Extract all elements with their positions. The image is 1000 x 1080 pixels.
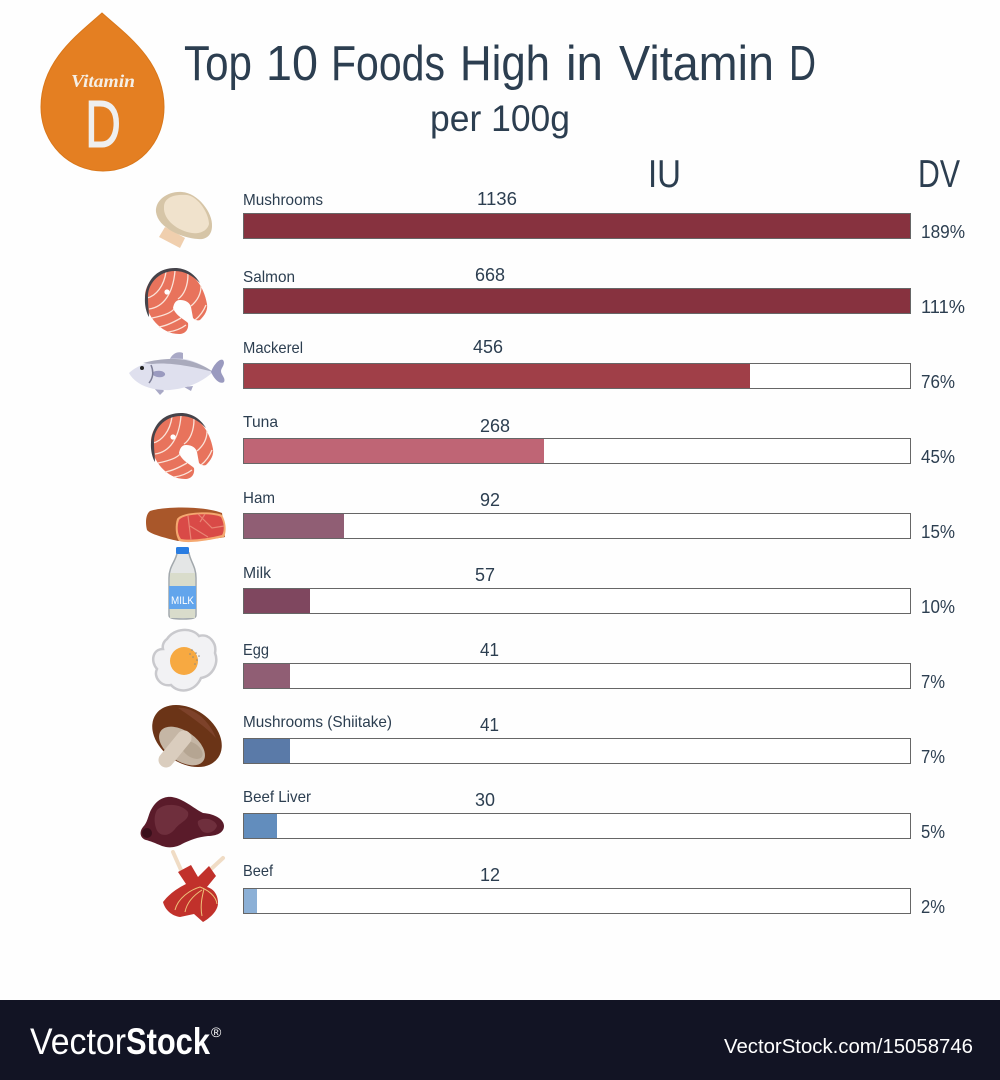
label: Milk — [243, 565, 272, 582]
footer logo — [30, 1021, 222, 1062]
label: Egg — [243, 642, 269, 659]
footer logo: Stock — [126, 1021, 210, 1062]
icon: vitamin D drop — [41, 13, 164, 171]
percent: 2% — [921, 897, 945, 917]
title: Foods — [331, 37, 445, 91]
bar — [244, 664, 910, 688]
value: 57 — [475, 565, 495, 585]
label: Salmon — [243, 269, 295, 286]
percent: 10% — [921, 597, 955, 617]
icon: beef ribs — [163, 852, 223, 922]
bar — [244, 814, 910, 838]
icon: shiitake mushroom — [140, 692, 234, 780]
value: 41 — [480, 715, 499, 735]
icon: salmon steak — [145, 268, 207, 334]
row: Mushrooms — [156, 189, 965, 248]
value: 41 — [480, 640, 499, 660]
row: Mackerel — [129, 337, 955, 395]
label: Mushrooms — [243, 192, 323, 209]
bar — [244, 888, 910, 914]
percent: 7% — [921, 672, 945, 692]
label: Tuna — [243, 414, 278, 431]
title: High — [460, 37, 550, 91]
bar — [244, 288, 910, 314]
percent: 45% — [921, 447, 955, 467]
row: Ham — [146, 490, 955, 542]
row: Beef Liver — [141, 789, 945, 847]
row: Egg — [153, 630, 945, 692]
bar — [244, 588, 910, 614]
row: Beef — [163, 852, 945, 922]
icon: milk bottle: MILK — [171, 595, 195, 607]
label: Mackerel — [243, 340, 303, 357]
footer logo: ® — [211, 1024, 222, 1040]
icon: fish — [129, 352, 224, 395]
value: 668 — [475, 265, 505, 285]
subtitle: per 100g — [430, 98, 570, 139]
column heading: DV: DV — [918, 153, 960, 196]
icon: beef liver — [141, 797, 224, 847]
icon: milk bottle — [169, 547, 196, 619]
column heading: IU: IU — [648, 153, 681, 196]
bar — [244, 738, 910, 764]
title: D — [789, 37, 816, 91]
title: 10 — [266, 37, 318, 91]
value: 12 — [480, 865, 500, 885]
percent: 76% — [921, 372, 955, 392]
percent: 189% — [921, 222, 965, 242]
row: Tuna — [151, 413, 955, 479]
row: Milk — [169, 547, 955, 619]
percent: 7% — [921, 747, 945, 767]
label: Mushrooms (Shiitake) — [243, 714, 392, 731]
icon: fried egg — [153, 630, 216, 690]
title: Top — [184, 37, 252, 91]
title — [184, 37, 816, 91]
value: 1136 — [477, 189, 517, 209]
icon: ham — [146, 507, 226, 542]
value: 456 — [473, 337, 503, 357]
icon: vitamin D drop: D — [85, 87, 121, 162]
bar — [244, 214, 910, 238]
row: Shiitake — [140, 692, 945, 780]
icon: vitamin D drop: Vitamin — [71, 71, 135, 91]
value: 92 — [480, 490, 500, 510]
title: in — [566, 37, 603, 91]
icon: mushroom — [156, 192, 212, 248]
label: Beef Liver — [243, 789, 312, 806]
bar — [244, 514, 910, 538]
icon: tuna steak — [151, 413, 213, 479]
label: Ham — [243, 490, 275, 507]
footer logo: Vector — [30, 1021, 126, 1062]
percent: 5% — [921, 822, 945, 842]
bar — [244, 364, 910, 388]
value: 268 — [480, 416, 510, 436]
footer bar — [0, 1000, 1000, 1080]
title: Vitamin — [619, 37, 774, 91]
percent: 15% — [921, 522, 955, 542]
percent: 111% — [921, 297, 965, 317]
value: 30 — [475, 790, 495, 810]
bar — [244, 438, 910, 464]
footer id: VectorStock.com/15058746 — [724, 1036, 973, 1058]
label: Beef — [243, 863, 273, 880]
row: Salmon — [145, 265, 965, 334]
